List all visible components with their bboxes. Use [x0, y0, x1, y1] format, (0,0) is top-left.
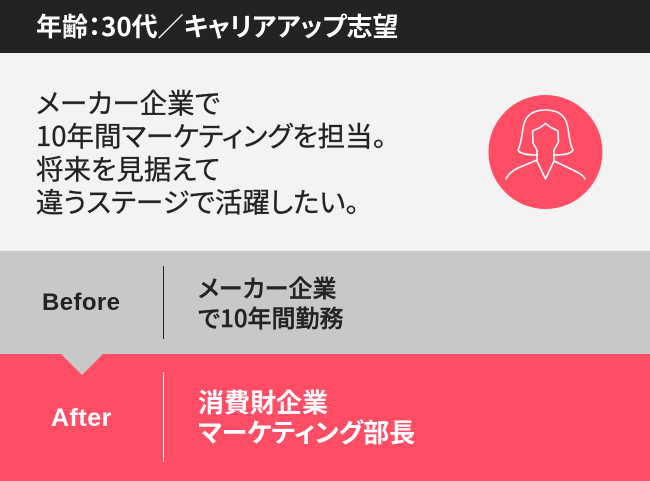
before text: メーカー企業 — [198, 269, 336, 304]
panel: profile — [0, 53, 650, 251]
after divider — [163, 372, 164, 462]
after text: 消費財企業 — [198, 383, 328, 420]
after label: After — [51, 404, 112, 432]
panel: before — [0, 251, 650, 354]
before divider — [163, 266, 164, 339]
profile text: 将来を見据えて — [36, 147, 220, 187]
profile text — [36, 81, 386, 220]
profile text: 違うステージで活躍したい。 — [36, 180, 359, 220]
profile text: メーカー企業で — [36, 81, 220, 121]
panel: after — [0, 354, 650, 481]
icon: woman avatar — [488, 95, 602, 209]
arrow: before to after — [61, 354, 103, 375]
header bar — [0, 0, 650, 53]
header title: 年齢：30代／キャリアアップ志望 — [36, 7, 398, 44]
profile text: 10年間マーケティングを担当。 — [36, 114, 386, 154]
before text: で10年間勤務 — [198, 298, 344, 334]
after text — [198, 383, 415, 450]
after text: マーケティング部長 — [198, 413, 415, 450]
before label: Before — [42, 289, 120, 316]
before text — [198, 269, 344, 334]
